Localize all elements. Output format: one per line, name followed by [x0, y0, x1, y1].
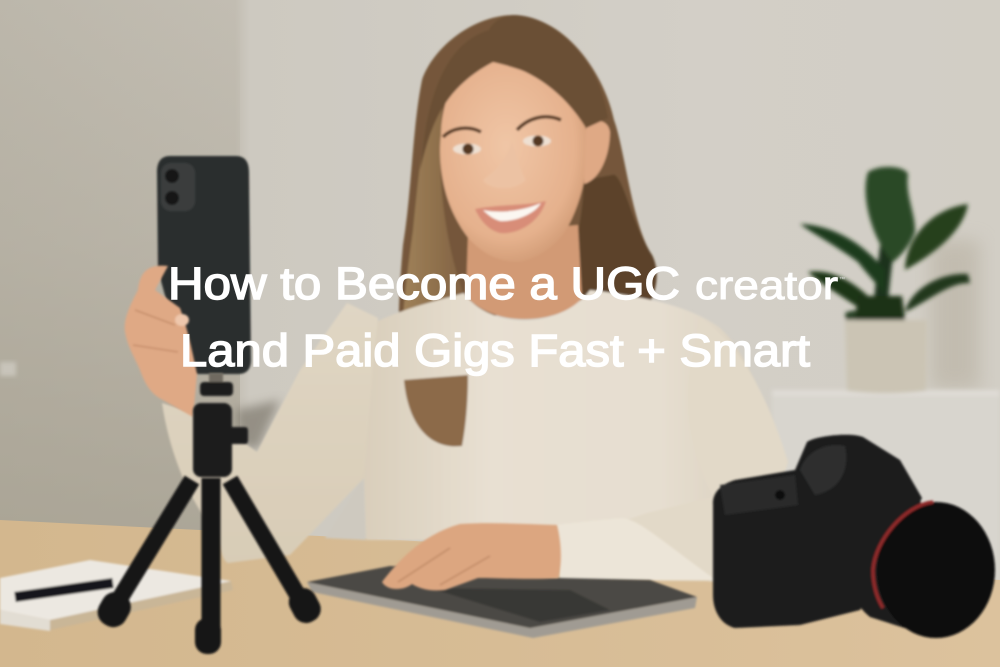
icon: DSLR camera	[713, 435, 995, 638]
hand resting on laptop	[382, 523, 561, 591]
trademark mark: ™	[839, 276, 845, 283]
lips and smile	[475, 201, 546, 233]
right sleeve	[610, 318, 788, 581]
title line 2: Land Paid Gigs Fast + Smart	[180, 325, 811, 376]
left hair strand light	[401, 90, 468, 447]
hair tip over sweater	[404, 375, 468, 446]
lens red ring	[873, 502, 933, 608]
ear	[584, 121, 610, 184]
eyes	[453, 144, 481, 154]
wall shadow behind plant	[930, 240, 980, 390]
sweater torso	[364, 290, 788, 582]
title line 1: How to Become a UGC	[168, 258, 680, 309]
title	[168, 258, 845, 376]
hair right shadow	[560, 175, 657, 318]
sleeve cuff	[557, 518, 716, 581]
lens barrel	[843, 495, 933, 637]
eyebrows	[443, 128, 481, 137]
face	[440, 62, 588, 262]
desk	[0, 520, 1000, 667]
icon: tripod	[93, 373, 325, 654]
icon: potted plant	[800, 167, 970, 393]
laptop	[307, 566, 697, 638]
lens front	[877, 502, 995, 638]
shadow of arm on wall	[236, 400, 280, 450]
left arm sleeve	[162, 303, 378, 563]
hand holding phone	[125, 266, 197, 417]
woman	[162, 15, 788, 582]
notebook and pen	[0, 560, 233, 631]
title word: creator: creator	[695, 264, 838, 308]
nose	[483, 140, 526, 188]
camera prism highlight	[800, 445, 846, 495]
icon: smartphone	[157, 156, 251, 374]
wall shelf on right	[772, 390, 1000, 584]
light wall gap	[325, 478, 366, 540]
plant pot	[845, 320, 927, 393]
left wall ledge	[0, 362, 16, 376]
neck	[466, 225, 582, 319]
hair back	[399, 15, 657, 447]
hair top	[420, 15, 608, 170]
